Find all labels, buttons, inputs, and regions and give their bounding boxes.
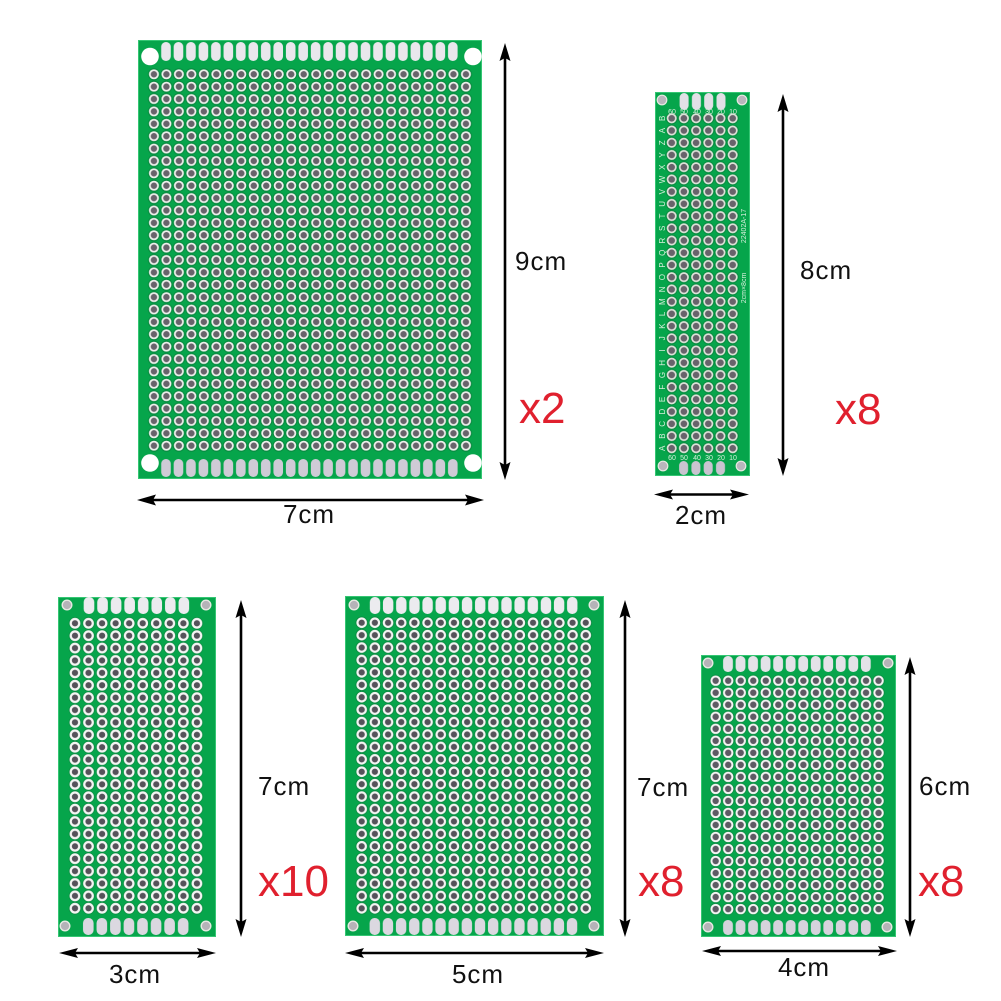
panel: 3cm by 7cm circuit board [58,597,216,936]
silkscreen: bottom column numbers: 30 [705,455,713,462]
label: 9cm: 9cm [515,246,567,276]
arrow: 2cm board height [778,94,788,476]
silkscreen: bottom column numbers: 20 [717,455,725,462]
silkscreen: board size: 2cm×8cm [741,273,748,303]
silkscreen: row letters: M [658,298,667,305]
silkscreen: bottom column numbers: 50 [680,455,688,462]
silkscreen: row letters: L [658,311,667,316]
quantity: x10: x10 [258,857,329,906]
silkscreen: row letters: C [658,421,667,427]
silkscreen: row letters: B [658,116,667,121]
arrow: 3cm board height [236,600,246,937]
silkscreen: row letters: F [658,385,667,390]
silkscreen: row letters: E [658,397,667,402]
label: 2cm: 2cm [675,500,727,530]
arrow: 3cm board width [59,948,216,958]
silkscreen: row letters: V [658,188,667,194]
silkscreen: bottom column numbers: 60 [668,455,676,462]
silkscreen: row letters [658,116,667,451]
silkscreen: row letters: A [658,445,667,451]
quantity: x2: x2 [519,384,565,433]
silkscreen: row letters: I [658,349,667,352]
label: 7cm: 7cm [283,499,335,529]
silkscreen: row letters: G [658,372,667,378]
arrow: 7cm board width [137,494,484,506]
silkscreen: row letters: U [658,201,667,207]
arrow: 5cm board height [620,600,630,937]
silkscreen: row letters: A [658,127,667,133]
label: 7cm: 7cm [258,771,310,801]
silkscreen: row letters: D [658,408,667,414]
silkscreen: board code: 22402A-17 [741,209,748,243]
silkscreen: bottom column numbers [668,455,737,462]
quantity: x8: x8 [638,857,684,906]
label: 4cm: 4cm [778,952,830,982]
silkscreen: row letters: Z [658,140,667,145]
label: 5cm: 5cm [452,959,504,989]
arrow: 4cm board width [702,946,897,956]
silkscreen: row letters: B [658,433,667,439]
label: 8cm: 8cm [800,255,852,285]
silkscreen: row letters: T [658,214,667,219]
silkscreen: top column numbers [668,109,737,116]
label: 7cm: 7cm [637,772,689,802]
silkscreen: row letters: Y [658,152,667,158]
silkscreen: bottom column numbers: 10 [729,455,737,462]
silkscreen: top column numbers: 30 [705,109,713,116]
silkscreen: row letters: Q [658,250,667,256]
label: 6cm: 6cm [919,771,971,801]
label: 3cm: 3cm [109,959,161,989]
panel: 2cm by 8cm circuit board [656,92,750,476]
silkscreen: row letters: O [658,274,667,280]
silkscreen: top column numbers: 20 [717,109,725,116]
arrow: 4cm board height [904,657,916,937]
silkscreen: row letters: J [658,336,667,340]
silkscreen: row letters: X [658,164,667,170]
silkscreen: top column numbers: 10 [729,109,737,116]
silkscreen: row letters: R [658,237,667,243]
silkscreen: top column numbers: 40 [693,109,701,116]
silkscreen: row letters: H [658,360,667,366]
silkscreen: row letters: W [658,175,667,183]
silkscreen: top column numbers: 60 [668,109,676,116]
quantity: x8: x8 [918,857,964,906]
panel: 7cm by 9cm circuit board [138,40,482,478]
silkscreen: top column numbers: 50 [680,109,688,116]
panel: 5cm by 7cm circuit board [346,596,604,936]
silkscreen: row letters: P [658,262,667,268]
arrow: 2cm board width [654,490,749,500]
panel: 4cm by 6cm circuit board [702,656,896,936]
quantity: x8: x8 [835,385,881,434]
silkscreen: bottom column numbers: 40 [693,455,701,462]
arrow: 5cm board width [345,948,604,958]
silkscreen: row letters: S [658,226,667,231]
silkscreen: row letters: N [658,286,667,292]
arrow: 7cm board height [500,43,510,480]
silkscreen: row letters: K [658,323,667,329]
